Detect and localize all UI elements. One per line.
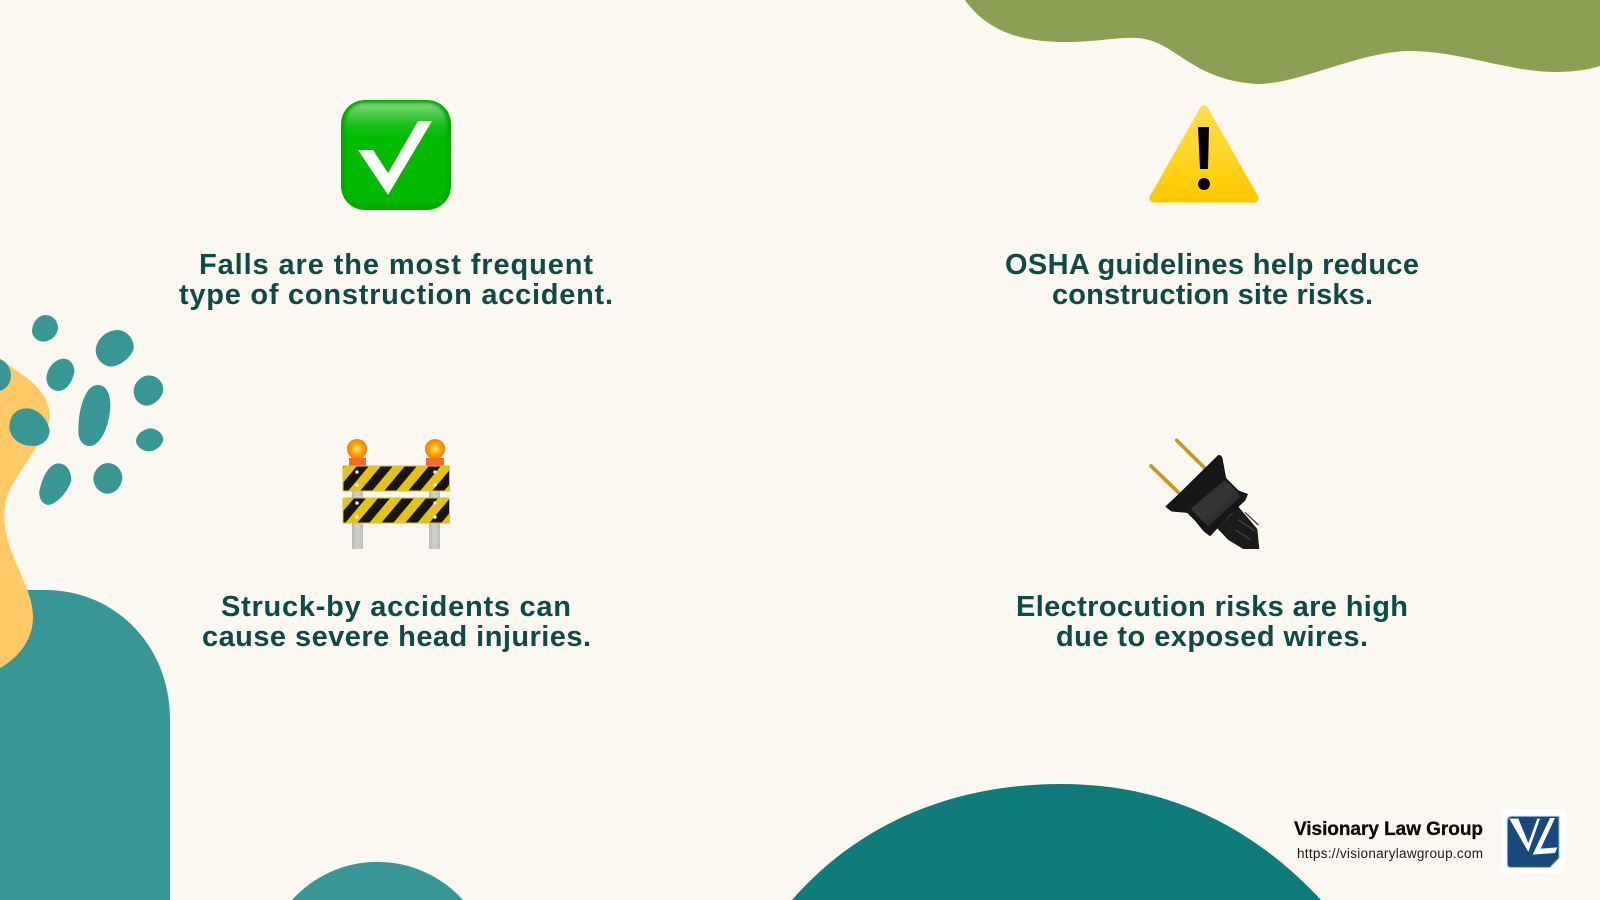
brand text: https://visionarylawgroup.com: [1297, 846, 1483, 861]
text: electrocution: due to exposed wires.: [1056, 621, 1368, 653]
text: falls: [179, 249, 613, 311]
decorative dots cluster: [0, 315, 163, 505]
text: falls: type of construction accident.: [179, 279, 613, 311]
decorative shape: teal bottom left: [0, 590, 170, 900]
logo: [1501, 809, 1566, 873]
icon: construction barricade: [343, 439, 450, 549]
text: struck-by: cause severe head injuries.: [202, 621, 591, 653]
text: electrocution: Electrocution risks are high: [1016, 591, 1408, 623]
text: electrocution: [1016, 591, 1408, 653]
brand text: Visionary Law Group: [1294, 819, 1483, 840]
decorative arc: small teal bottom: [292, 862, 463, 900]
text: osha: [1005, 249, 1419, 311]
brand text: [1294, 819, 1483, 861]
icon: electric plug: [1151, 440, 1259, 549]
decorative arc: dark teal bottom: [792, 784, 1321, 900]
icon: warning triangle: [1154, 110, 1254, 198]
text: osha: OSHA guidelines help reduce: [1005, 249, 1419, 281]
icon: green check mark: [341, 100, 451, 210]
text: struck-by: Struck-by accidents can: [221, 591, 571, 623]
decorative blob: yellow left: [0, 358, 49, 668]
text: osha: construction site risks.: [1052, 279, 1373, 311]
text: falls: Falls are the most frequent: [199, 249, 593, 281]
text: struck-by: [202, 591, 591, 653]
decorative blob: olive top right: [965, 0, 1600, 84]
